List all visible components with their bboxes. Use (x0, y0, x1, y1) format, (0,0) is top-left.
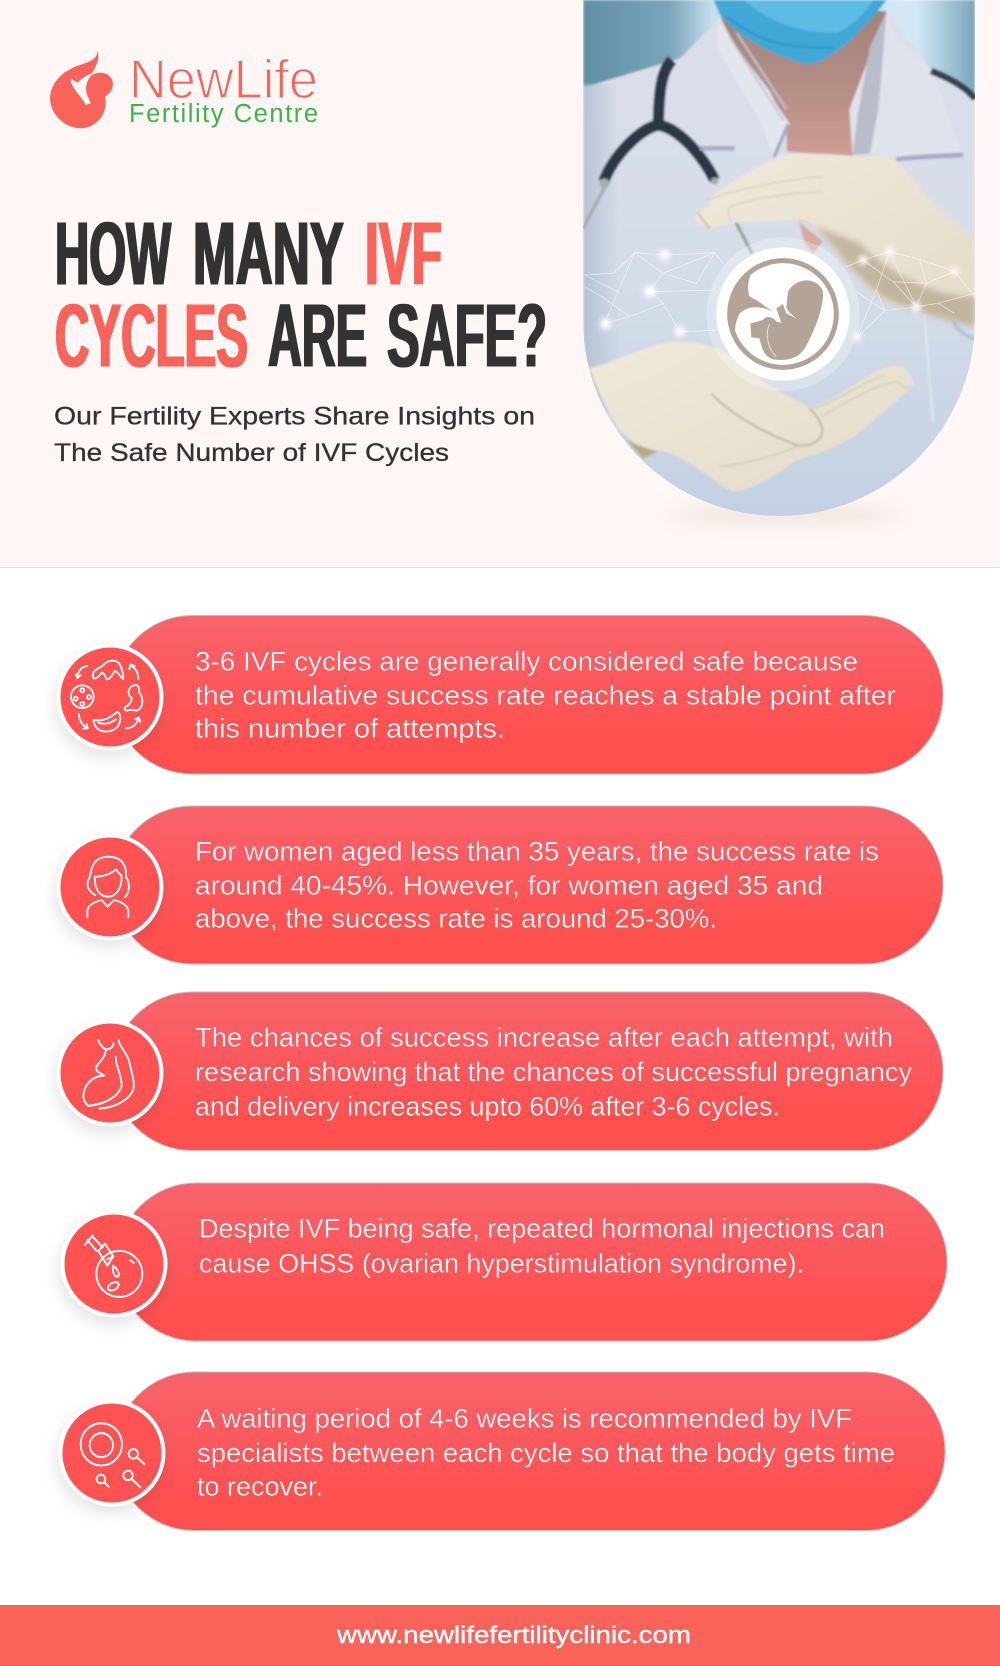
pill text: Despite IVF being safe, repeated hormonal injections can (199, 1214, 885, 1244)
light sparkles (600, 247, 959, 342)
pill text: cause OHSS (ovarian hyperstimulation syndrome). (199, 1248, 804, 1278)
pill text (195, 1022, 913, 1122)
pill background (113, 992, 943, 1150)
panel: success rate by age (58, 806, 943, 964)
footer url: www.newlifefertilityclinic.com (336, 1622, 691, 1649)
pill background (115, 1372, 945, 1530)
pill text: this number of attempts. (195, 714, 505, 744)
pill text: research showing that the chances of successful pregnancy (195, 1057, 913, 1087)
logo wordmark: NewLife (129, 48, 318, 110)
embryo emblem (706, 237, 860, 391)
panel: OHSS warning (62, 1183, 947, 1341)
panel: 3-6 IVF cycles (58, 616, 943, 774)
bottom gloved hand (590, 342, 913, 492)
pill text: above, the success rate is around 25-30%. (195, 904, 717, 934)
pill background (113, 616, 943, 774)
title: IVF (365, 204, 442, 304)
pill text: around 40-45%. However, for women aged 35 and (195, 870, 823, 900)
stethoscope (583, 60, 976, 338)
title: ARE (268, 286, 367, 386)
footer bar (0, 1605, 1000, 1666)
icon: syringe into egg (62, 1212, 166, 1316)
pill text: the cumulative success rate reaches a stable point after (195, 680, 896, 710)
pill text (195, 646, 896, 744)
icon: IVF cycle (58, 646, 162, 748)
logo tagline: Fertility Centre (129, 100, 318, 128)
pill text (195, 836, 879, 934)
pill text: 3-6 IVF cycles are generally considered safe because (195, 646, 858, 676)
pill text: The chances of success increase after each attempt, with (195, 1022, 893, 1052)
icon: mother and baby mark (50, 50, 113, 128)
network lines (585, 252, 975, 338)
pill text: For women aged less than 35 years, the success rate is (195, 836, 879, 866)
panel: waiting period (60, 1372, 945, 1530)
icon: woman (58, 836, 162, 938)
title (55, 204, 547, 386)
icon: egg and sperm (60, 1402, 164, 1504)
header panel (0, 0, 1000, 568)
title: SAFE? (387, 286, 547, 386)
pill background (113, 806, 943, 964)
title: CYCLES (55, 286, 248, 386)
title: MANY (193, 204, 344, 304)
pill text (197, 1404, 895, 1502)
subtitle: Our Fertility Experts Share Insights on (54, 402, 535, 430)
icon: pregnant woman (58, 1022, 162, 1124)
subtitle: The Safe Number of IVF Cycles (54, 439, 449, 467)
subtitle (54, 402, 535, 467)
logo: NewLife Fertility Centre (50, 48, 318, 128)
pill text (199, 1214, 885, 1278)
pill text: A waiting period of 4-6 weeks is recommended by IVF (197, 1404, 852, 1434)
photo: doctor holding embryo hologram (583, 0, 976, 518)
title: HOW (55, 204, 171, 304)
panel: chances of success (58, 992, 943, 1150)
pill text: specialists between each cycle so that the body gets time (197, 1438, 895, 1468)
pill text: and delivery increases upto 60% after 3-6 cycles. (195, 1092, 780, 1122)
top gloved hand (696, 154, 975, 327)
pill background (117, 1183, 947, 1341)
pill text: to recover. (197, 1472, 323, 1502)
photo shadow (667, 504, 903, 526)
